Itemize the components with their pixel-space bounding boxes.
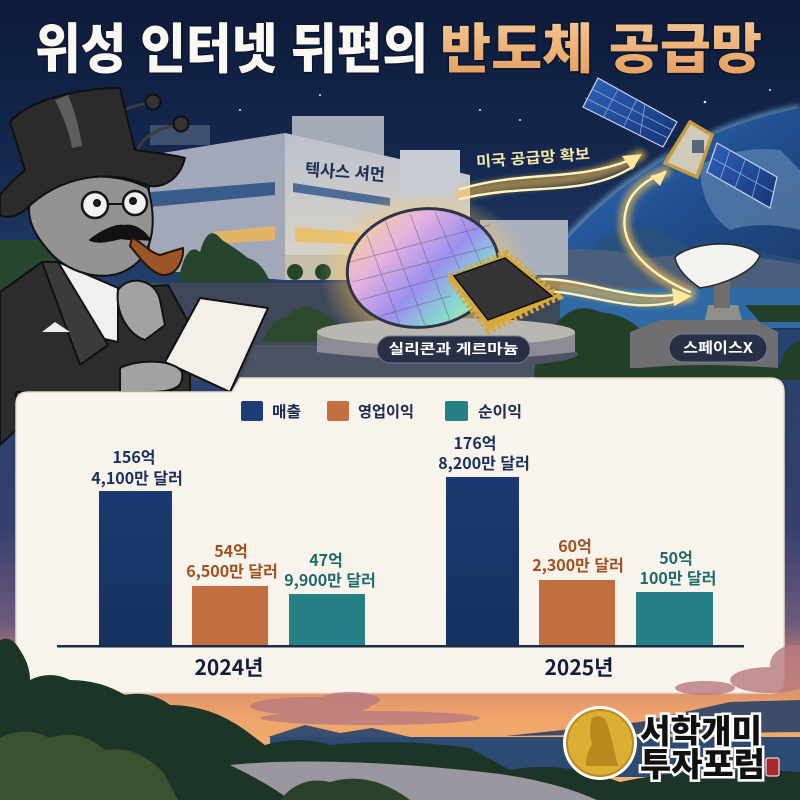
semiconductor chip bbox=[449, 254, 557, 330]
trees below dish bbox=[535, 340, 800, 380]
held paper bbox=[165, 298, 268, 392]
bar chart: 2025: 176억 bbox=[453, 430, 497, 454]
satellite body bbox=[665, 122, 712, 177]
bar chart: 2025: 50억 bbox=[659, 545, 693, 569]
low trees before wall bbox=[280, 779, 410, 800]
bar chart: 2025: 60억 bbox=[558, 533, 592, 557]
golden supply arrows bbox=[460, 154, 692, 306]
chart baseline bbox=[57, 645, 744, 648]
logo wordmark line 1: 서학개미 bbox=[640, 705, 762, 753]
shirt bbox=[58, 262, 118, 342]
pill label: silicon and germanium bbox=[377, 336, 530, 363]
sea and far hills bbox=[268, 700, 800, 777]
background: stars bbox=[239, 39, 771, 121]
chart panel bbox=[16, 378, 784, 693]
satellite right solar panel bbox=[707, 143, 777, 208]
lower hand bbox=[120, 362, 182, 392]
suit bbox=[0, 262, 190, 445]
legend: 순이익 bbox=[478, 400, 522, 422]
legend: 매출 bbox=[272, 400, 301, 422]
red seal bbox=[766, 758, 779, 776]
bar chart: 2024: 6,500만 달러 bbox=[186, 558, 278, 582]
ground, road and trees bbox=[0, 233, 800, 380]
character: investor in top hat bbox=[0, 88, 268, 445]
concrete wall bbox=[230, 762, 597, 800]
building sign: 텍사스 셔먼 bbox=[304, 155, 386, 186]
hat bbox=[0, 88, 185, 217]
earth globe bbox=[505, 108, 800, 330]
dish base platform bbox=[630, 320, 778, 368]
foreground trees bbox=[0, 639, 800, 800]
distant mountains and sea bbox=[540, 249, 800, 328]
arrowheads bbox=[622, 154, 692, 306]
bar chart: 2024: 4,100만 달러 bbox=[91, 465, 183, 489]
bar chart: 2024 bbox=[91, 444, 376, 646]
thinking hand bbox=[118, 281, 165, 340]
bar chart: 2024: 47억 bbox=[309, 547, 343, 571]
title: white part: 위성 인터넷 뒤편의 bbox=[35, 5, 428, 84]
year label 2025: 2025년 bbox=[545, 652, 613, 682]
logo bbox=[563, 705, 779, 786]
satellite dish bbox=[630, 244, 778, 368]
year label 2024: 2024년 bbox=[195, 652, 263, 682]
wafer glow bbox=[320, 190, 530, 360]
pipe bbox=[130, 238, 183, 275]
silicon wafer bbox=[340, 199, 506, 337]
antennae bbox=[100, 103, 180, 152]
pedestal bbox=[314, 318, 578, 368]
bar chart: 2025: 2,300만 달러 bbox=[532, 552, 624, 576]
gold coin bbox=[563, 706, 637, 780]
dish reflector bbox=[675, 244, 760, 288]
legend bbox=[241, 400, 522, 422]
bar chart: 2025: 8,200만 달러 bbox=[438, 450, 530, 474]
title: orange part: 반도체 공급망 bbox=[440, 5, 762, 84]
logo wordmark line 2: 투자포럼 bbox=[640, 738, 765, 786]
bar chart: 2024: 9,900만 달러 bbox=[284, 567, 376, 591]
head bbox=[29, 176, 153, 276]
legend: 영업이익 bbox=[358, 400, 414, 422]
bar chart: 2025 bbox=[438, 430, 716, 646]
mustache bbox=[90, 226, 150, 242]
pill label: SpaceX: 스페이스X bbox=[683, 337, 753, 358]
label: US supply chain: 미국 공급망 확보 bbox=[475, 143, 591, 172]
bar chart: 2024: 54억 bbox=[214, 538, 248, 562]
title bbox=[35, 5, 762, 84]
bar chart: 2025: 100만 달러 bbox=[640, 565, 716, 589]
sunset clouds bbox=[250, 645, 800, 725]
glasses bbox=[82, 191, 147, 218]
pill label: SpaceX bbox=[669, 334, 767, 362]
satellite left solar panel bbox=[583, 78, 677, 147]
factory building bbox=[150, 116, 568, 280]
pill label: silicon and germanium: 실리콘과 게르마늄 bbox=[388, 339, 519, 359]
satellite bbox=[583, 78, 777, 208]
bar chart: 2024: 156억 bbox=[112, 444, 156, 468]
